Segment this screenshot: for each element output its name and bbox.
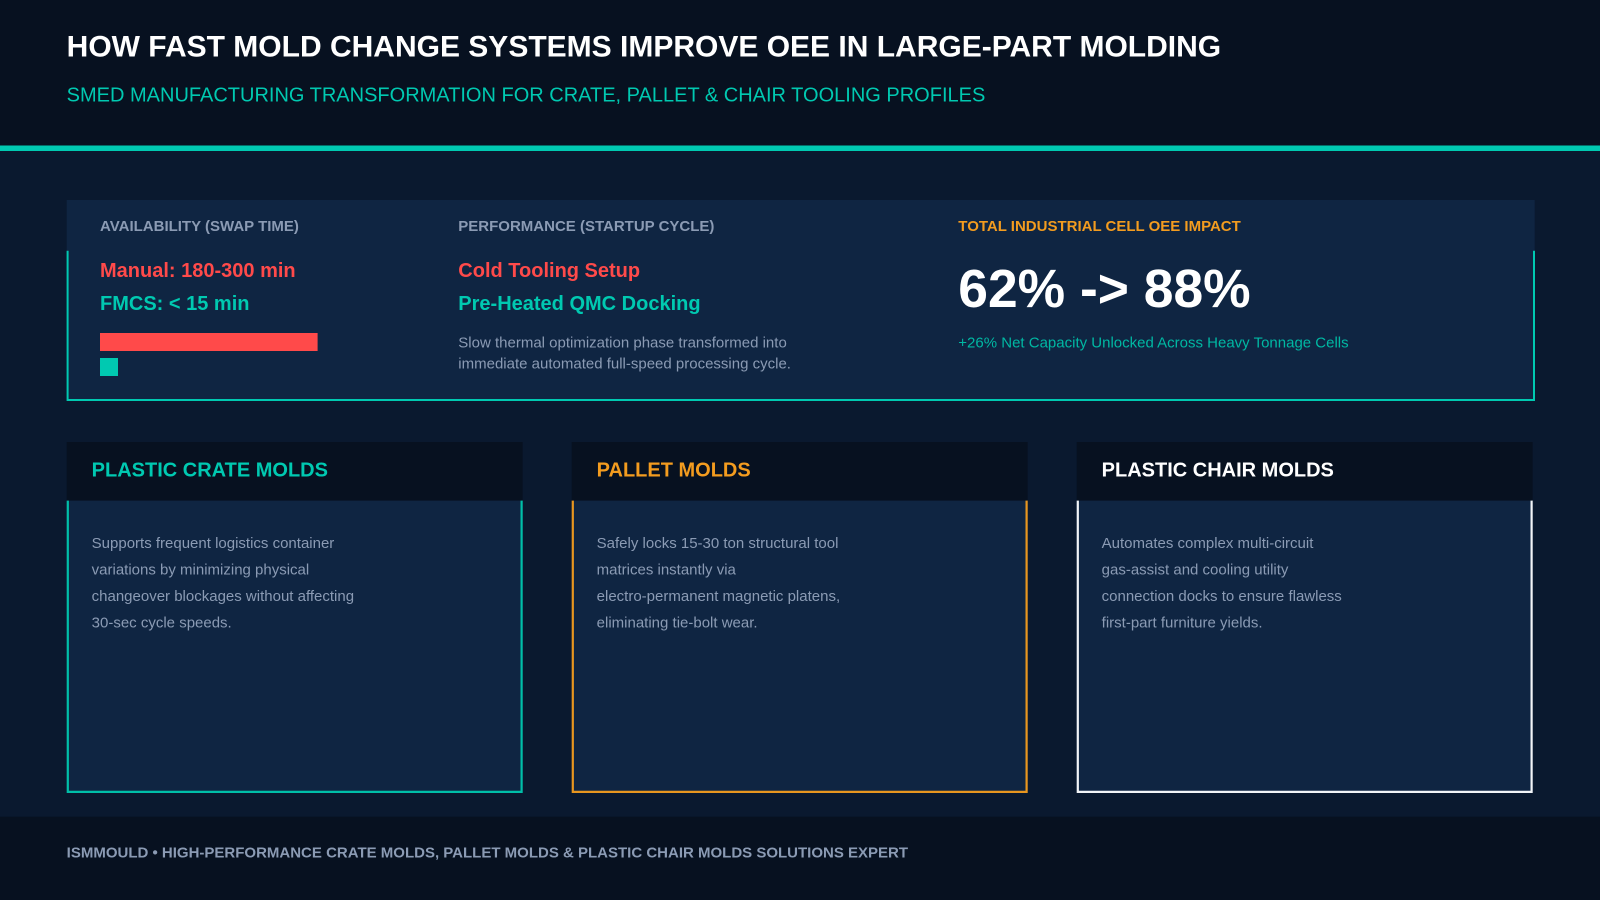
metric: total OEE impact: 62% -> 88% <box>958 260 1251 319</box>
metric: availability: FMCS: < 15 min <box>100 293 249 315</box>
metric: total OEE impact: TOTAL INDUSTRIAL CELL OEE IMPACT <box>958 218 1241 235</box>
metric: performance: Slow thermal optimization phase transformed into <box>458 335 787 352</box>
panel: pallet molds: matrices instantly via <box>597 561 737 578</box>
bar: FMCS swap time <box>100 358 118 376</box>
footer <box>0 817 1600 900</box>
panel: OEE metrics <box>67 200 1535 401</box>
title: HOW FAST MOLD CHANGE SYSTEMS IMPROVE OEE IN LARGE-PART MOLDING <box>67 31 1221 64</box>
metric: availability: Manual: 180-300 min <box>100 260 296 282</box>
panel: pallet molds: Safely locks 15-30 ton structural tool <box>597 535 838 552</box>
bar: manual swap time <box>100 333 318 351</box>
panel: plastic crate molds <box>67 442 523 793</box>
panel: plastic chair molds <box>1077 442 1533 793</box>
panel: plastic crate molds: Supports frequent logistics container <box>92 535 334 552</box>
panel: pallet molds: PALLET MOLDS <box>597 460 751 482</box>
metric: performance: PERFORMANCE (STARTUP CYCLE) <box>458 218 714 235</box>
panel: pallet molds: eliminating tie-bolt wear. <box>597 615 758 632</box>
header band <box>0 0 1600 151</box>
metric: total OEE impact <box>958 218 1349 352</box>
metric: availability: AVAILABILITY (SWAP TIME) <box>100 218 299 235</box>
panel: plastic crate molds: changeover blockages without affecting <box>92 588 354 605</box>
panel: plastic chair molds: first-part furniture yields. <box>1102 615 1263 632</box>
subtitle: SMED MANUFACTURING TRANSFORMATION FOR CRATE, PALLET & CHAIR TOOLING PROFILES <box>67 85 985 107</box>
panel: plastic chair molds: PLASTIC CHAIR MOLDS <box>1102 460 1334 482</box>
panel: pallet molds <box>572 442 1028 793</box>
metric: availability <box>100 218 318 376</box>
panel: plastic chair molds: gas-assist and cooling utility <box>1102 561 1289 578</box>
metric: performance: Cold Tooling Setup <box>458 260 640 282</box>
panel: plastic crate molds: PLASTIC CRATE MOLDS <box>92 460 328 482</box>
metric: total OEE impact: +26% Net Capacity Unlocked Across Heavy Tonnage Cells <box>958 335 1349 352</box>
panel: plastic chair molds: connection docks to ensure flawless <box>1102 588 1342 605</box>
panel: pallet molds: electro-permanent magnetic platens, <box>597 588 840 605</box>
footer: ISMMOULD • HIGH-PERFORMANCE CRATE MOLDS, PALLET MOLDS & PLASTIC CHAIR MOLDS SOLUTIONS EXPERT <box>67 844 908 862</box>
metric: performance: immediate automated full-speed processing cycle. <box>458 356 791 373</box>
metric: performance <box>458 218 791 373</box>
panel: plastic crate molds: variations by minimizing physical <box>92 561 309 578</box>
panel: plastic crate molds: 30-sec cycle speeds. <box>92 615 232 632</box>
panel: plastic chair molds: Automates complex multi-circuit <box>1102 535 1314 552</box>
metric: performance: Pre-Heated QMC Docking <box>458 293 701 315</box>
